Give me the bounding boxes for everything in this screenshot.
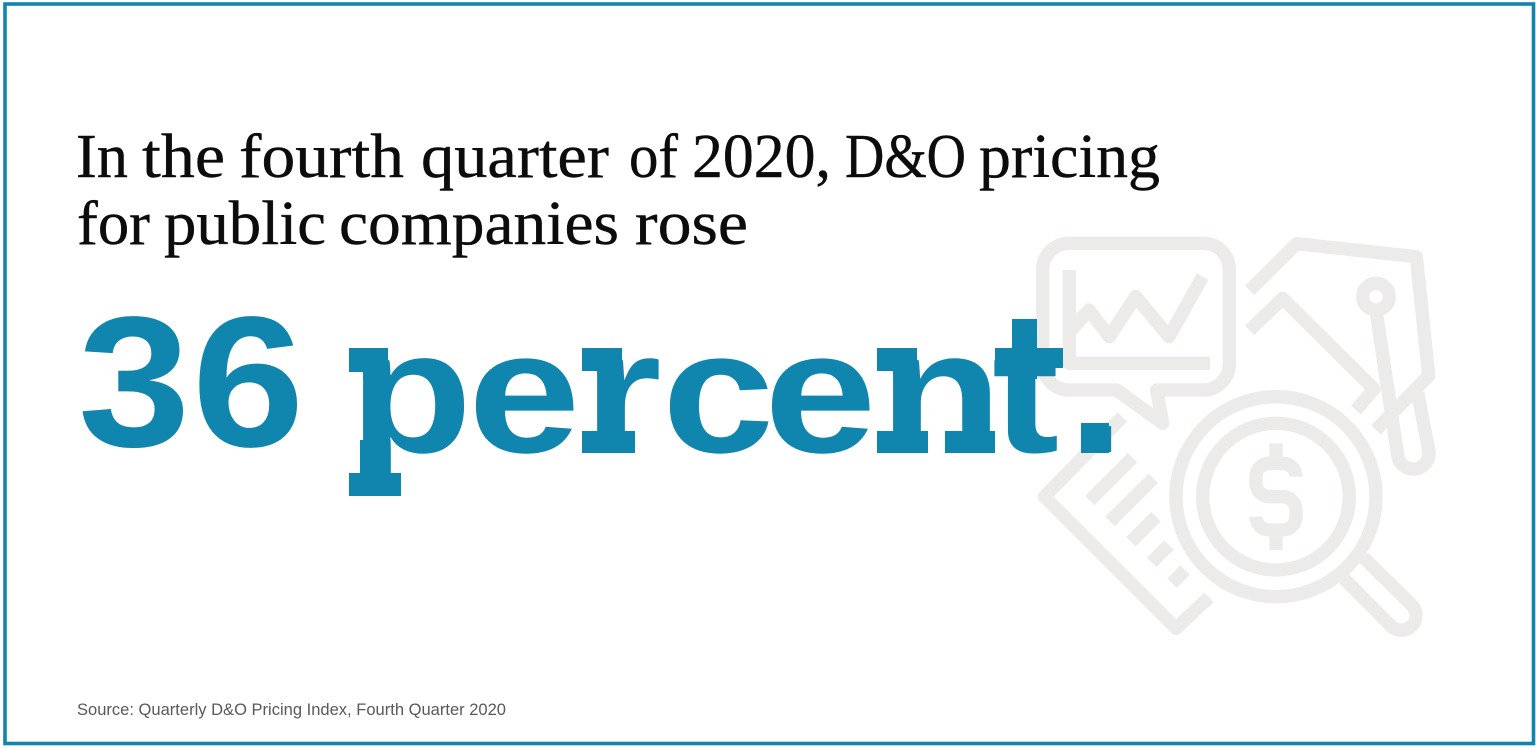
- icon: speech bubble with line chart: [1043, 243, 1229, 423]
- icon: pricing analysis watermark: [1043, 243, 1429, 630]
- icon: price tag: [1250, 244, 1429, 469]
- source note: Source: Quarterly D&O Pricing Index, Fourth Quarter 2020: [77, 701, 506, 719]
- heading line 2: for: [77, 190, 150, 258]
- heading line 1: D&O: [845, 123, 966, 191]
- heading line 1: [76, 123, 1160, 191]
- icon: magnifying glass with dollar sign: [1176, 397, 1416, 630]
- big statistic: percent.: [349, 294, 1125, 489]
- heading line 1: of: [629, 123, 678, 191]
- heading line 2: rose: [635, 190, 748, 258]
- big statistic: [78, 278, 1125, 496]
- heading line 1: quarter: [421, 123, 609, 191]
- heading line 1: the: [142, 123, 225, 191]
- heading line 2: companies: [339, 190, 619, 258]
- heading line 1: In: [76, 123, 128, 191]
- heading line 1: pricing: [979, 123, 1160, 191]
- heading line 1: 2020,: [692, 123, 831, 191]
- heading line 2: [77, 190, 748, 258]
- heading: [76, 123, 1160, 258]
- heading line 1: fourth: [239, 123, 404, 191]
- icon: document list: [1044, 417, 1209, 628]
- big statistic: 36: [78, 278, 304, 486]
- heading line 2: public: [164, 190, 326, 258]
